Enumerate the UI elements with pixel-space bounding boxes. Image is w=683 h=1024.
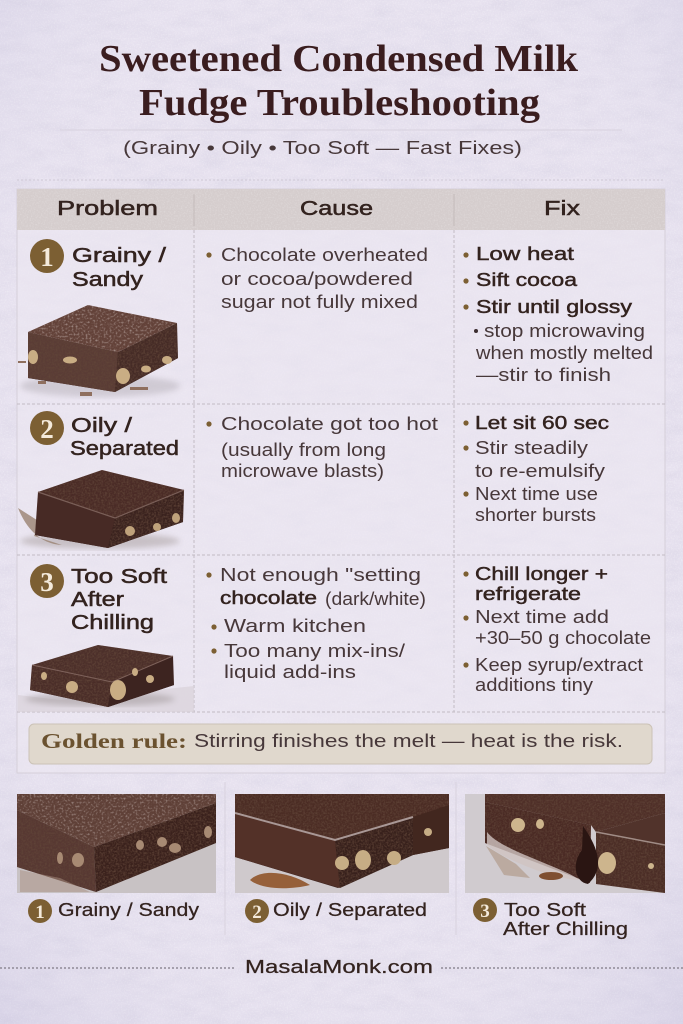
row 1 cause: Chocolate overheated — [221, 245, 428, 265]
row 1 fix — [463, 244, 653, 385]
row 2 cause: (usually from long — [221, 440, 386, 460]
number badge 3 — [30, 564, 64, 598]
title — [99, 38, 579, 124]
row 2 fix: Stir steadily — [475, 438, 588, 458]
row 1 fix: stop microwaving — [484, 321, 645, 341]
panel: troubleshooting table — [17, 189, 665, 773]
row 3 fix: Keep syrup/extract — [475, 655, 643, 675]
photo: oily fudge square — [18, 470, 184, 549]
row 1 problem: grainy sandy — [18, 239, 180, 397]
row 3 cause: Too many mix-ins/ — [224, 641, 405, 661]
caption 3: 3 — [480, 901, 490, 922]
panel: bottom photo strip — [17, 782, 665, 939]
row 1 fix: Low heat — [476, 244, 574, 264]
row 3 cause — [206, 565, 426, 682]
row 3 fix: refrigerate — [475, 584, 581, 604]
row 2 fix — [463, 413, 609, 525]
callout: golden rule — [29, 724, 652, 764]
table header row — [17, 189, 665, 230]
row 1 fix: —stir to finish — [476, 365, 611, 385]
callout: golden rule: Golden rule: — [41, 729, 187, 753]
row 3 cause: liquid add-ins — [224, 662, 356, 682]
title: Fudge Troubleshooting — [139, 82, 540, 124]
table header row: Cause — [300, 198, 373, 220]
photo: grainy close-up — [17, 794, 216, 893]
number badge 2 — [30, 411, 64, 445]
row 1 problem: grainy sandy: Sandy — [72, 269, 143, 291]
row 3 problem: too soft after chilling: After — [71, 589, 124, 611]
row 1 problem: grainy sandy: Grainy / — [72, 245, 167, 267]
row 2 fix: to re-emulsify — [475, 461, 605, 481]
row 2 fix: Next time use — [475, 484, 598, 504]
title: Sweetened Condensed Milk — [99, 38, 579, 80]
caption 3: Too Soft — [504, 900, 586, 920]
row 2 problem: oily separated — [18, 411, 184, 549]
row 3 problem: too soft after chilling — [18, 564, 194, 712]
row 1 cause: sugar not fully mixed — [221, 292, 418, 312]
row 2 cause: microwave blasts) — [221, 461, 384, 481]
row 2 cause — [206, 414, 438, 481]
footer: site name: MasalaMonk.com — [245, 957, 433, 977]
photo: oily close-up — [235, 794, 449, 893]
callout: golden rule: Stirring finishes the melt — heat is the risk. — [194, 731, 623, 751]
caption 3 — [473, 898, 628, 939]
row 3 fix — [463, 564, 651, 695]
caption 1 — [28, 899, 199, 923]
row 2 problem: oily separated: Separated — [70, 438, 179, 460]
caption 2: Oily / Separated — [273, 900, 427, 920]
table header row: Problem — [57, 198, 158, 220]
row 3 cause: Not enough "setting — [220, 565, 421, 585]
caption 1: Grainy / Sandy — [58, 900, 199, 920]
caption 1: 1 — [35, 902, 45, 923]
table header row: Fix — [544, 198, 580, 220]
row 2 fix: Let sit 60 sec — [475, 413, 609, 433]
row 1 fix: Sift cocoa — [476, 270, 578, 290]
row 3 fix: additions tiny — [475, 675, 593, 695]
row 3 fix: Chill longer + — [475, 564, 608, 584]
subtitle: (Grainy • Oily • Too Soft — Fast Fixes) — [123, 138, 522, 158]
row 1 cause — [206, 245, 428, 312]
row 3 fix: +30–50 g chocolate — [475, 628, 651, 648]
row 1 fix: Stir until glossy — [476, 297, 632, 317]
row 3 cause: Warm kitchen — [224, 616, 366, 636]
row 3 fix: Next time add — [475, 607, 609, 627]
number badge 3: 3 — [40, 567, 54, 597]
number badge 2: 2 — [40, 414, 54, 444]
photo: soft fudge square — [18, 645, 194, 712]
row 3 problem: too soft after chilling: Chilling — [71, 612, 154, 634]
row 1 cause: or cocoa/powdered — [221, 269, 413, 289]
number badge 1: 1 — [40, 242, 54, 272]
row 3 problem: too soft after chilling: Too Soft — [71, 566, 168, 588]
row 3 cause: (dark/white) — [325, 589, 426, 609]
row 1 fix: when mostly melted — [475, 343, 653, 363]
row 2 fix: shorter bursts — [475, 505, 596, 525]
caption 2: 2 — [252, 902, 262, 923]
caption 3: After Chilling — [503, 919, 628, 939]
row 2 problem: oily separated: Oily / — [71, 415, 133, 437]
photo: grainy fudge square — [18, 305, 180, 397]
caption 2 — [245, 899, 427, 923]
photo: soft close-up — [465, 794, 665, 893]
row 2 cause: Chocolate got too hot — [221, 414, 438, 434]
number badge 1 — [30, 239, 64, 273]
row 3 cause: chocolate — [220, 588, 317, 608]
